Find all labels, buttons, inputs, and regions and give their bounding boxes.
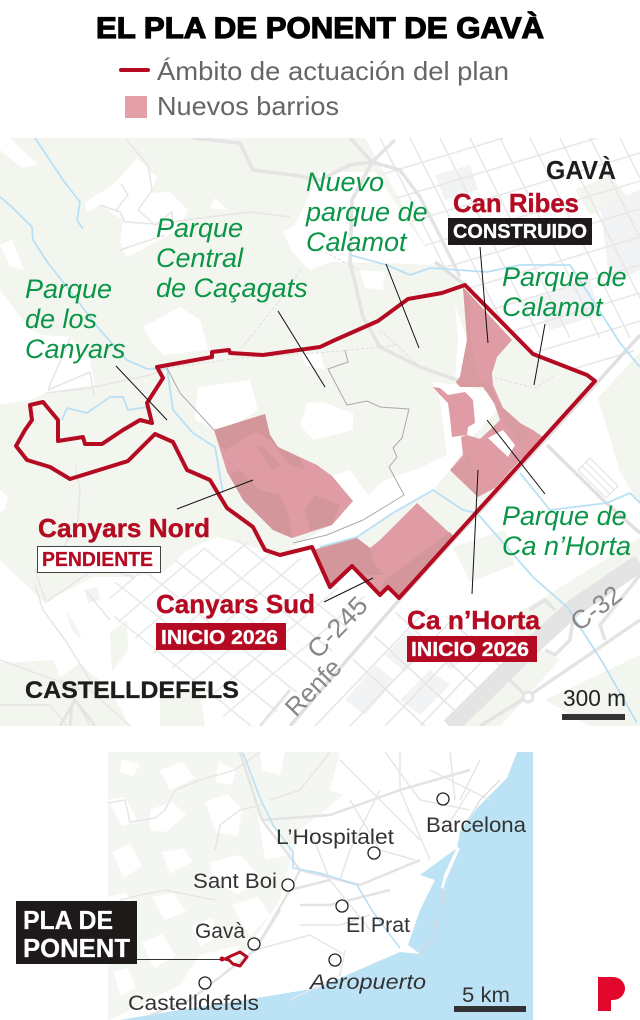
label: Parque Central de Caçagats: de Caçagats: [156, 273, 308, 303]
streets: Castelldefels grid: [109, 539, 364, 726]
label: GAVÀ: GAVÀ: [546, 155, 616, 185]
neighbourhood: Can Ribes: [456, 287, 543, 460]
land: green areas: [0, 138, 640, 727]
callout: Canyars Sud: INICIO 2026: [161, 627, 278, 649]
callout: Pla de Ponent: [16, 901, 224, 964]
locator: label Castelldefels: Castelldefels: [128, 992, 259, 1015]
label: Parque de Calamot: Parque de: [502, 262, 627, 292]
callout: Pla de Ponent: PLA DE: [23, 905, 113, 935]
label: Parque de Ca n'Horta: Ca n’Horta: [502, 531, 631, 561]
title: EL PLA DE PONENT DE GAVÀ: [96, 11, 544, 45]
road: northern road and Calamot arc: [193, 138, 460, 380]
callout: Can Ribes: [448, 188, 592, 245]
locator: land green: [108, 752, 360, 1020]
blocks: grey urban fabric: [65, 165, 640, 715]
locator: secondary roads: [108, 752, 490, 1000]
main map: [0, 138, 640, 726]
legend: new neighbourhoods label: Nuevos barrios: [157, 91, 339, 121]
legend: [121, 56, 509, 121]
locator: breakwater: [441, 847, 460, 890]
locator: roads: [150, 752, 470, 1015]
callout: Pla de Ponent: PONENT: [23, 933, 130, 963]
roads: minor roads: [0, 138, 290, 735]
locator: label Gavà: Gavà: [195, 920, 245, 943]
label: Parque Central de Caçagats: Parque: [156, 213, 243, 243]
logo: [598, 977, 625, 1011]
label: Parque de los Canyars: de los: [25, 304, 97, 334]
locator: label Barcelona: [426, 793, 526, 837]
label: Parque de Ca n'Horta: Parque de: [502, 501, 627, 531]
label: CASTELLDEFELS: CASTELLDEFELS: [25, 677, 239, 704]
locator: scale bar 5 km: 5 km: [462, 984, 510, 1007]
road: C-32 ramps and junction: [60, 575, 640, 726]
locator: label El Prat: El Prat: [346, 914, 410, 937]
locator: label Gavà: [195, 920, 260, 950]
callout: Ca n'Horta: [407, 605, 541, 662]
callout: Ca n'Horta: INICIO 2026: [411, 639, 529, 661]
label: Parque de los Canyars: Parque: [25, 274, 112, 304]
legend: plan boundary label: Ámbito de actuación del plan: [157, 56, 509, 86]
road: eastern and coastal corridors: [290, 262, 640, 726]
legend: plan boundary line: [121, 68, 148, 72]
hatch: sports ground: [578, 458, 618, 498]
locator: label Sant Boi: Sant Boi: [193, 870, 277, 893]
neighbourhood: Ca n'Horta: [433, 387, 533, 497]
callout: Can Ribes: CONSTRUIDO: [453, 221, 587, 243]
leader lines: [116, 247, 545, 602]
legend: new neighbourhoods swatch: [125, 96, 147, 118]
locator: sea: [120, 752, 533, 1020]
locator: label L'Hospitalet: [276, 826, 394, 859]
locator: plan boundary marker: [225, 952, 247, 966]
callout: Canyars Nord: [38, 513, 210, 572]
road label: C-245: C-245: [301, 590, 374, 664]
municipal limit: [167, 350, 409, 543]
rivers: [0, 138, 640, 723]
label: Parque de Calamot: Calamot: [502, 292, 604, 322]
label: Nuevo parque de Calamot: Calamot: [306, 227, 408, 257]
callout: Canyars Nord: Canyars Nord: [38, 513, 210, 543]
label: Parque de los Canyars: Canyars: [25, 334, 126, 364]
locator: label Barcelona: Barcelona: [426, 814, 526, 837]
scale bar: 300 m: 300 m: [563, 685, 626, 711]
label: Nuevo parque de Calamot: Nuevo: [306, 167, 384, 197]
locator: label L'Hospitalet: L’Hospitalet: [276, 826, 394, 849]
locator: label Aeropuerto: Aeropuerto: [308, 971, 426, 994]
park footpaths: [167, 250, 555, 388]
label: Nuevo parque de Calamot: parque de: [305, 197, 428, 227]
locator: label El Prat: [336, 900, 410, 937]
road label: C-32: C-32: [565, 579, 627, 637]
locator: port: [420, 780, 500, 954]
callout: Canyars Sud: [156, 589, 315, 650]
locator map: [108, 752, 533, 1020]
callout: Canyars Nord: PENDIENTE: [42, 549, 153, 571]
streets: Gavà grid: [380, 138, 640, 371]
locator: river Llobregat: [243, 753, 400, 948]
plan boundary: [16, 285, 595, 598]
callout: Ca n'Horta: Ca n’Horta: [407, 605, 541, 635]
locator: white patches: [108, 752, 360, 996]
scale bar: 300 m: [562, 690, 625, 720]
label: Parque Central de Caçagats: Central: [156, 243, 244, 273]
locator: label Aeropuerto: [308, 954, 426, 994]
neighbourhood: Canyars Sud: [313, 503, 454, 598]
streets: industrial estate: [314, 608, 500, 726]
locator: scale bar 5 km: [454, 984, 526, 1012]
land: white open areas: [0, 138, 497, 660]
road: C-32 motorway: [450, 563, 640, 727]
callout: Canyars Sud: Canyars Sud: [156, 589, 315, 619]
locator: label Castelldefels: [128, 977, 259, 1015]
neighbourhood: Canyars Nord: [214, 414, 353, 538]
callout: Can Ribes: Can Ribes: [453, 188, 579, 218]
road label: Renfe: Renfe: [279, 652, 348, 722]
